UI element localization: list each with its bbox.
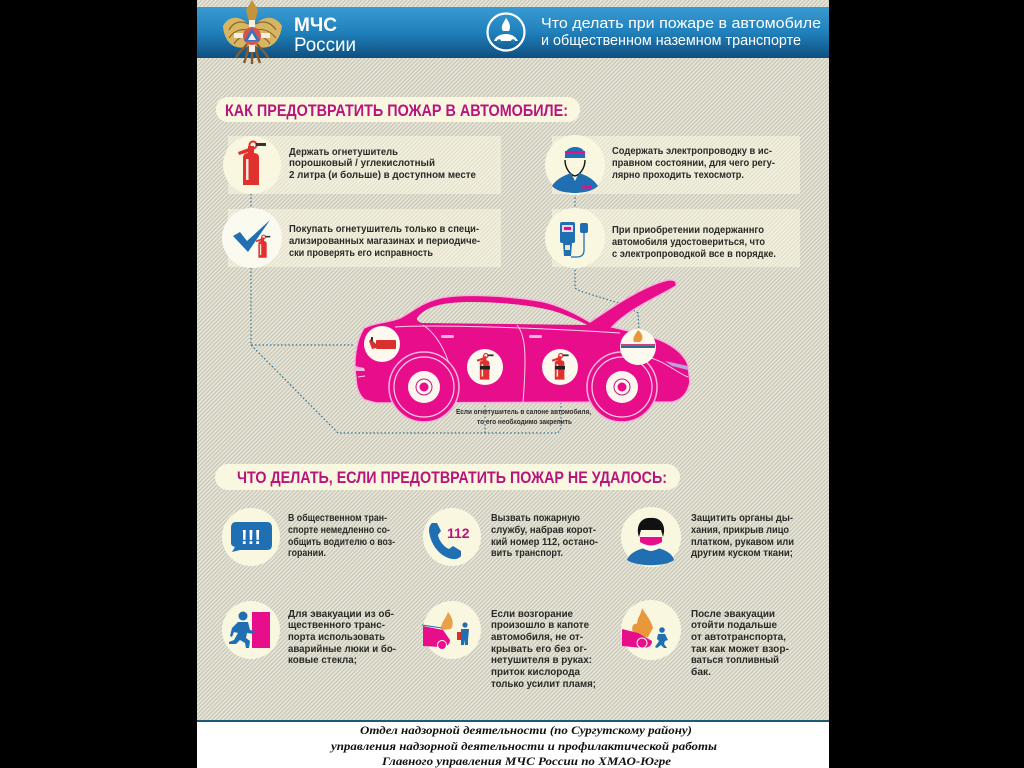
icon: flame under hood bbox=[620, 329, 656, 365]
text: call 112 bbox=[491, 513, 598, 559]
footer: Отдел надзорной деятельности (по Сургутскому району) bbox=[360, 723, 692, 737]
step: call 112 bbox=[423, 508, 598, 566]
logo text: МЧС bbox=[294, 14, 337, 36]
text: wiring bbox=[612, 146, 775, 181]
text: wiring: Содержать электропроводку в ис- bbox=[612, 146, 772, 157]
header title: Что делать при пожаре в автомобиле bbox=[541, 15, 821, 32]
icon: MChS emblem bbox=[223, 0, 282, 64]
text: move away: от автотранспорта, bbox=[691, 632, 786, 643]
icon: burning car and man bbox=[422, 601, 481, 659]
panel: wiring bbox=[545, 135, 800, 195]
icon: phone 112 bbox=[423, 508, 481, 566]
car body bbox=[355, 280, 690, 403]
heading: if fire happened bbox=[215, 464, 680, 490]
text: evacuation exits: Для эвакуации из об- bbox=[288, 608, 394, 620]
text: tell the driver: В общественном тран- bbox=[288, 512, 387, 524]
text: move away: так как может взор- bbox=[691, 644, 789, 655]
header title: и общественном наземном транспорте bbox=[541, 32, 801, 49]
logo text: России bbox=[294, 35, 356, 56]
connector lines bbox=[251, 190, 639, 433]
text: do not open hood: только усилит пламя; bbox=[491, 679, 596, 690]
heading: if fire happened: ЧТО ДЕЛАТЬ, ЕСЛИ ПРЕДОТВРАТИТЬ ПОЖАР НЕ УДАЛОСЬ: bbox=[237, 469, 667, 487]
text: move away: После эвакуации bbox=[691, 609, 775, 620]
text: used car: автомобиля удостовериться, что bbox=[612, 236, 765, 248]
text: do not open hood: приток кислорода bbox=[491, 667, 580, 678]
icon: running person and door bbox=[222, 601, 280, 659]
text: keep extinguisher: 2 литра (и больше) в доступном месте bbox=[289, 169, 476, 181]
text: used car: с электропроводкой все в порядке. bbox=[612, 249, 776, 260]
car window bbox=[417, 302, 587, 325]
car caption: то его необходимо закрепить bbox=[477, 417, 572, 426]
car caption bbox=[456, 407, 591, 426]
step: evacuation exits bbox=[222, 601, 396, 666]
icon: extinguisher in cabin, rear bbox=[467, 349, 503, 385]
heading: prevention bbox=[216, 97, 580, 122]
icon: speech bubble bbox=[222, 508, 280, 566]
text: buy extinguisher: Покупать огнетушитель только в специ- bbox=[289, 224, 479, 235]
panel: buy extinguisher bbox=[222, 208, 501, 268]
text: evacuation exits: щественного транс- bbox=[288, 620, 385, 631]
footer: Главного управления МЧС России по ХМАО-Югре bbox=[381, 754, 672, 768]
text: keep extinguisher: порошковый / углекислотный bbox=[289, 158, 435, 169]
text: tell the driver: спорте немедленно со- bbox=[288, 525, 390, 536]
text: do not open hood: автомобиля, не от- bbox=[491, 631, 583, 643]
header title bbox=[541, 15, 821, 49]
text: move away: ваться топливный bbox=[691, 655, 779, 666]
text: keep extinguisher bbox=[289, 147, 476, 181]
text: tell the driver: общить водителю о воз- bbox=[288, 536, 395, 548]
text: do not open hood bbox=[491, 609, 596, 690]
text: wiring: правном состоянии, для чего регу- bbox=[612, 158, 775, 169]
text: do not open hood: нетушителя в руках: bbox=[491, 655, 592, 666]
text: used car: При приобретении подержаннго bbox=[612, 224, 764, 236]
text: do not open hood: Если возгорание bbox=[491, 609, 573, 620]
text: buy extinguisher: ализированных магазинах и периодиче- bbox=[289, 236, 480, 247]
panel: used car bbox=[545, 208, 800, 268]
icon: car on fire in circle bbox=[488, 14, 524, 50]
footer bbox=[197, 720, 829, 768]
icon: check mark with extinguisher bbox=[222, 208, 282, 268]
icon: phone 112: 112 bbox=[447, 525, 470, 541]
text: protect airways bbox=[691, 513, 794, 559]
text: call 112: кий номер 112, остано- bbox=[491, 537, 598, 548]
car caption: Если огнетушитель в салоне автомобиля, bbox=[456, 407, 591, 416]
icon: extinguisher in cabin, front bbox=[542, 349, 578, 385]
text: keep extinguisher: Держать огнетушитель bbox=[289, 147, 398, 158]
text: move away bbox=[691, 609, 789, 678]
text: protect airways: платком, рукавом или bbox=[691, 537, 794, 548]
step: tell the driver bbox=[222, 508, 395, 566]
text: evacuation exits: ковые стекла; bbox=[288, 655, 357, 666]
text: used car bbox=[612, 224, 776, 260]
text: evacuation exits: порта использовать bbox=[288, 632, 385, 643]
icon: diagnostic tool bbox=[545, 208, 605, 268]
text: do not open hood: произошло в капоте bbox=[491, 620, 589, 631]
icon: extinguisher in trunk bbox=[364, 326, 400, 362]
step: move away bbox=[621, 600, 789, 678]
text: buy extinguisher: ски проверять его исправность bbox=[289, 248, 433, 259]
logo text bbox=[294, 14, 356, 56]
poster background bbox=[197, 0, 829, 722]
icon: extinguisher bbox=[223, 136, 281, 194]
front wheel bbox=[587, 352, 657, 422]
car illustration bbox=[355, 280, 690, 426]
text: call 112: вить транспорт. bbox=[491, 548, 563, 559]
text: buy extinguisher bbox=[289, 224, 480, 259]
panel: keep extinguisher bbox=[223, 136, 501, 194]
step: protect airways bbox=[621, 507, 794, 567]
text: protect airways: хания, прикрыв лицо bbox=[691, 525, 789, 536]
rear wheel bbox=[389, 352, 459, 422]
icon: burning car and runner bbox=[621, 600, 681, 660]
footer: управления надзорной деятельности и профилактической работы bbox=[329, 739, 717, 753]
text: evacuation exits bbox=[288, 608, 396, 666]
text: tell the driver bbox=[288, 512, 395, 559]
icon: speech bubble: !!! bbox=[241, 527, 261, 549]
heading: prevention: КАК ПРЕДОТВРАТИТЬ ПОЖАР В АВТОМОБИЛЕ: bbox=[225, 102, 568, 120]
text: protect airways: Защитить органы ды- bbox=[691, 513, 793, 524]
text: evacuation exits: аварийные люки и бо- bbox=[288, 643, 396, 655]
text: move away: отойти подальше bbox=[691, 620, 777, 631]
text: call 112: службу, набрав корот- bbox=[491, 524, 596, 536]
icon: person with mask bbox=[621, 507, 681, 567]
step: do not open hood bbox=[422, 601, 596, 690]
text: call 112: Вызвать пожарную bbox=[491, 513, 580, 524]
text: do not open hood: крывать его без ог- bbox=[491, 643, 587, 655]
text: tell the driver: горании. bbox=[288, 548, 326, 559]
text: protect airways: другим куском ткани; bbox=[691, 548, 793, 559]
car body lines bbox=[358, 325, 688, 403]
text: wiring: лярно проходить техосмотр. bbox=[612, 170, 744, 181]
icon: mechanic bbox=[545, 135, 605, 195]
text: move away: бак. bbox=[691, 666, 711, 678]
header bar bbox=[197, 0, 829, 64]
